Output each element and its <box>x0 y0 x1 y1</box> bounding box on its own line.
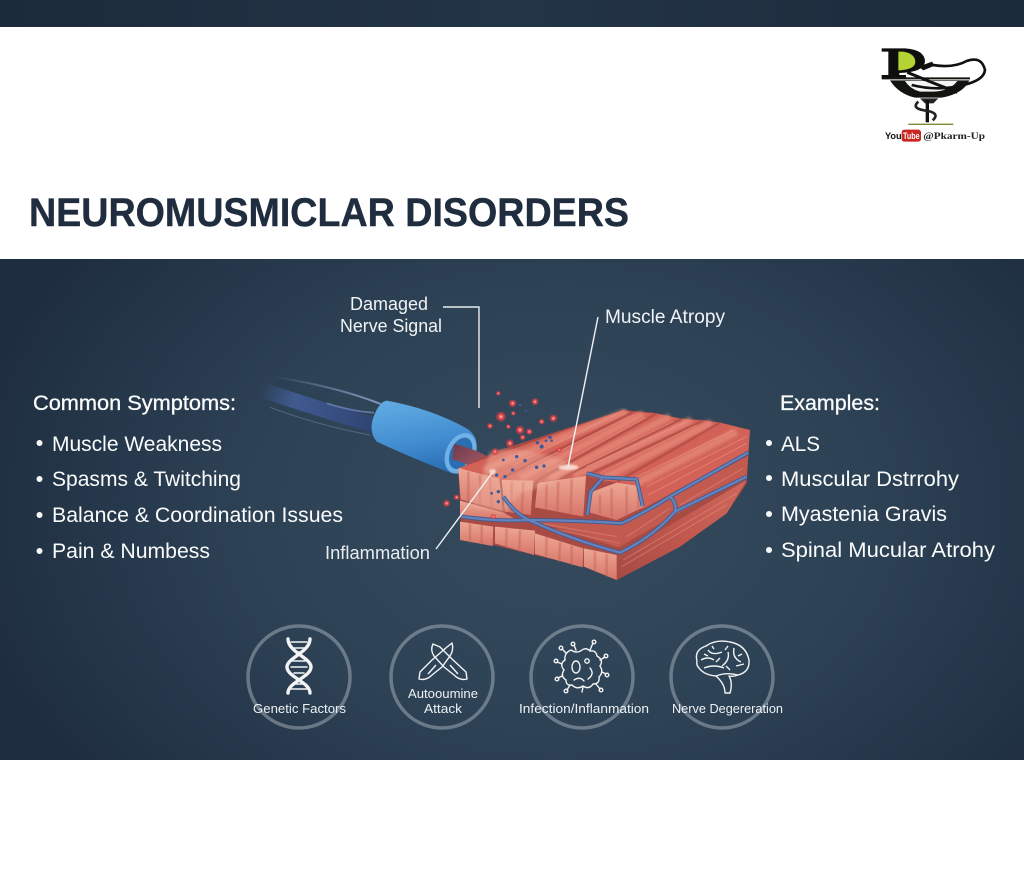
callout: damaged nerve signal: Nerve Signal <box>340 315 442 336</box>
cause: autoimmune attack: Attack <box>424 701 463 716</box>
top dark band <box>0 0 1024 27</box>
callout anchor glints <box>489 465 578 474</box>
symptom: spasms and twitching: Spasms & Twitching <box>52 468 241 491</box>
cause: nerve degeneration <box>671 626 783 728</box>
example: spinal muscular atrophy: Spinal Mucular Atrohy <box>781 539 996 562</box>
cause: genetic factors <box>248 626 350 728</box>
symptom: balance and coordination: Balance & Coordination Issues <box>52 504 343 527</box>
cause: nerve degeneration: Nerve Degereration <box>672 701 783 716</box>
side fibre strokes <box>543 468 743 567</box>
icon: brain <box>696 641 749 693</box>
panel: examples <box>766 392 996 562</box>
panel: common symptoms <box>33 392 343 563</box>
cause: genetic factors: Genetic Factors <box>253 701 346 716</box>
inflammation particles <box>443 391 562 520</box>
example: myasthenia gravis: Myastenia Gravis <box>781 503 947 526</box>
callout: damaged nerve signal <box>340 293 479 408</box>
muscle silhouette <box>458 410 750 580</box>
cause: infection and inflammation: Infection/Inflanmation <box>519 701 649 716</box>
vessel highlights <box>462 453 748 553</box>
title: NEUROMUSMICLAR DISORDERS <box>29 191 629 235</box>
front face striations <box>468 472 638 577</box>
logo: YouTube handle: You <box>885 131 902 141</box>
fine fibre lines <box>513 414 747 495</box>
example: muscular dystrophy: Muscular Dstrrohy <box>781 468 960 491</box>
inflamed damage patch <box>470 450 580 513</box>
icon: DNA helix <box>287 639 311 693</box>
main dark panel <box>0 259 1024 760</box>
icon: crossed hands <box>419 643 467 680</box>
icon: virus <box>554 640 609 693</box>
callout: inflammation: Inflammation <box>325 543 430 563</box>
logo: YouTube handle <box>885 130 985 142</box>
symptom: pain and numbness: Pain & Numbess <box>52 540 210 563</box>
callout: muscle atrophy: Muscle Atropy <box>605 307 725 328</box>
symptom: muscle weakness: Muscle Weakness <box>52 433 222 456</box>
illustration: nerve fibre with myelin sheath <box>260 377 507 485</box>
example: ALS: ALS <box>781 433 820 456</box>
callout: inflammation <box>325 473 492 563</box>
front end faces <box>458 468 643 580</box>
logo: YouTube handle: @Pkarm-Up <box>923 131 985 141</box>
bundle highlights <box>483 412 737 483</box>
cause: infection and inflammation <box>519 626 649 728</box>
logo: Rx bowl and snake <box>882 48 985 142</box>
cause: autoimmune attack: Autooumine <box>408 686 478 701</box>
cause: autoimmune attack <box>391 626 493 728</box>
muscle top bundles <box>458 410 750 508</box>
third layer side <box>617 480 747 580</box>
callout: muscle atrophy <box>568 307 725 467</box>
examples heading: Examples: <box>780 392 880 415</box>
illustration: muscle fibre block <box>458 410 750 580</box>
logo: YouTube handle: Tube <box>903 131 920 141</box>
blue blood vessels <box>462 453 748 553</box>
second layer side <box>537 456 748 547</box>
callout: damaged nerve signal: Damaged <box>350 293 428 314</box>
symptoms heading: Common Symptoms: <box>33 392 236 415</box>
bundle dark seams <box>500 412 720 482</box>
